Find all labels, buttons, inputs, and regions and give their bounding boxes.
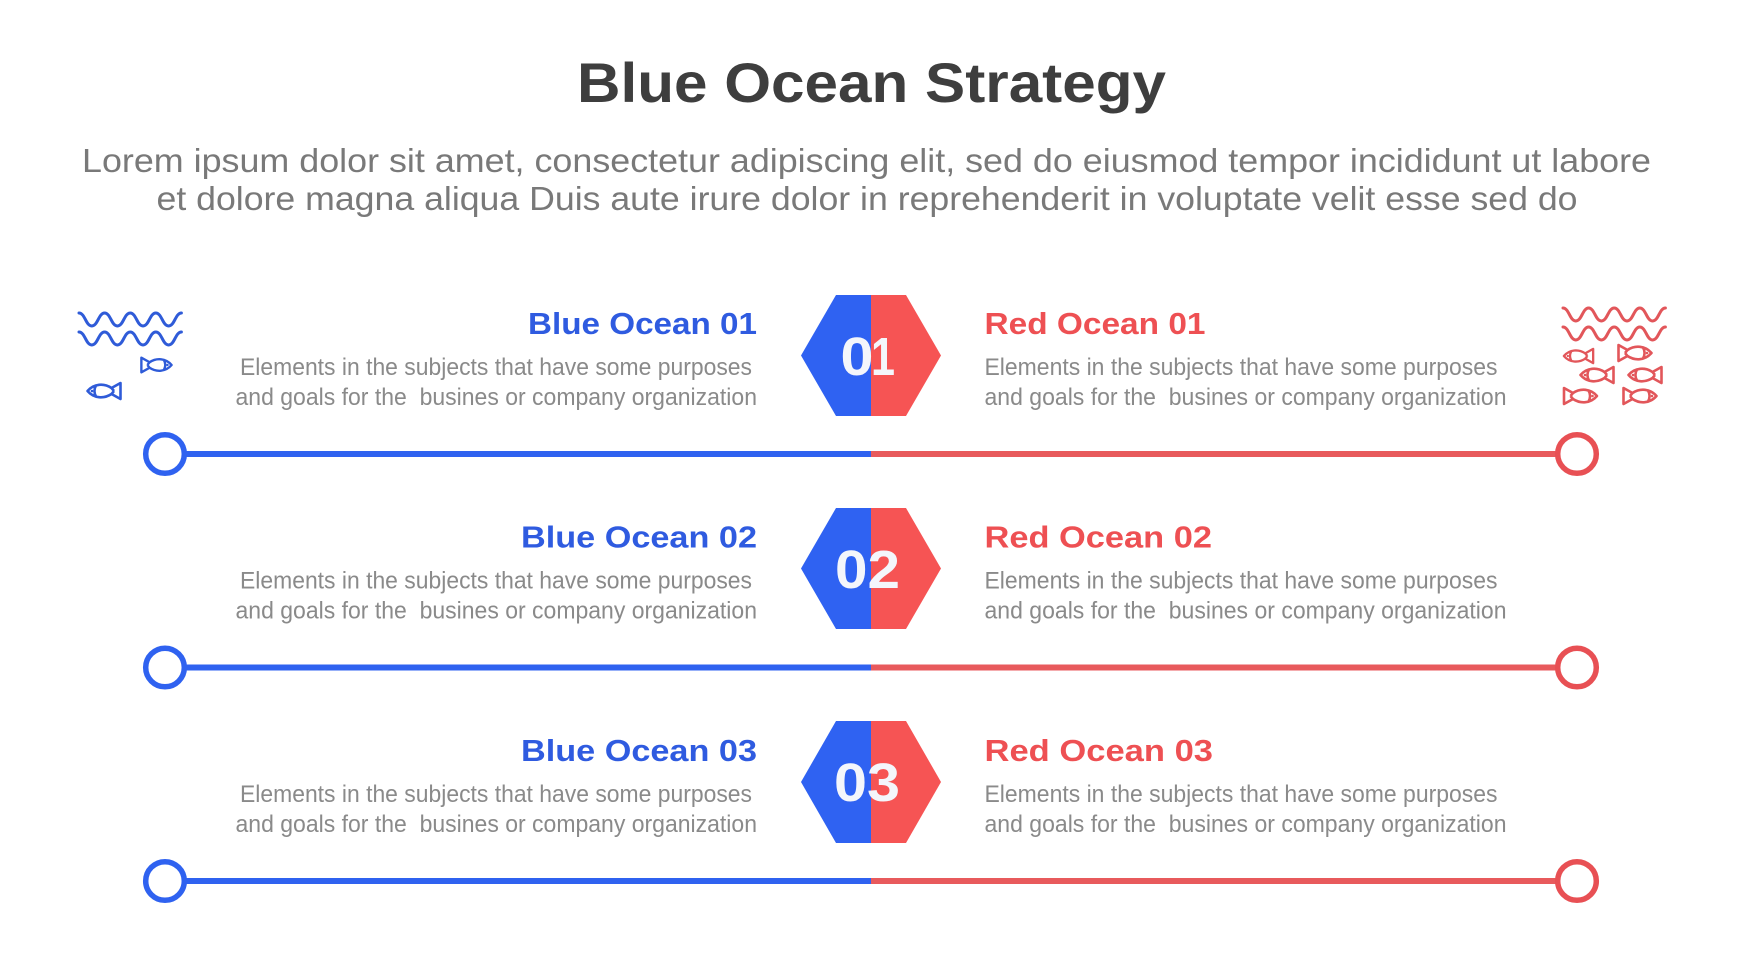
hexagon 02: 02 [835, 540, 900, 600]
hexagon 01 [801, 295, 941, 416]
hexagon 03: 03 [834, 753, 900, 813]
blue text 01 [236, 354, 757, 411]
subtitle text block [82, 142, 1651, 217]
red text 01 [984, 354, 1506, 411]
row 1 [146, 295, 1596, 473]
subtitle text block: et dolore magna aliqua Duis aute irure dolor in reprehenderit in voluptate velit esse sed do [156, 180, 1578, 217]
hexagon 02 [801, 508, 941, 629]
timeline 03 [146, 862, 1596, 900]
red text 03 [984, 781, 1506, 838]
title: Blue Ocean Strategy [577, 51, 1166, 114]
row 3 [146, 721, 1596, 900]
red text 01: and goals for the busines or company organization [984, 384, 1506, 411]
blue text 02: and goals for the busines or company organization [236, 598, 757, 624]
blue text 03: Elements in the subjects that have some purposes [240, 781, 752, 808]
red text 03: and goals for the busines or company organization [984, 811, 1506, 838]
hexagon 01: 0 [840, 327, 874, 387]
red text 02: and goals for the busines or company organization [984, 598, 1506, 624]
blue text 01: Elements in the subjects that have some purposes [240, 354, 752, 381]
red heading 01: Red Ocean 01 [984, 306, 1206, 341]
blue text 02: Elements in the subjects that have some purposes [240, 568, 752, 594]
red text 02: Elements in the subjects that have some purposes [984, 568, 1498, 594]
timeline 01 [146, 435, 1596, 473]
red text 01: Elements in the subjects that have some purposes [984, 354, 1498, 381]
icon: red ocean waves and fish [1563, 308, 1665, 404]
subtitle text block: Lorem ipsum dolor sit amet, consectetur adipiscing elit, sed do eiusmod tempor incididunt ut labore [82, 142, 1651, 179]
red text 03: Elements in the subjects that have some purposes [984, 781, 1498, 808]
blue heading 01: Blue Ocean 01 [528, 306, 757, 341]
red heading 02: Red Ocean 02 [984, 520, 1212, 554]
blue heading 02: Blue Ocean 02 [521, 520, 757, 554]
hexagon 03 [801, 721, 941, 843]
row 2 [146, 508, 1596, 687]
red heading 03: Red Ocean 03 [984, 733, 1213, 768]
blue text 03 [236, 781, 757, 838]
icon: blue ocean waves and fish [79, 313, 181, 399]
blue heading 03: Blue Ocean 03 [521, 733, 757, 768]
red text 02 [984, 568, 1506, 624]
hexagon 01: 1 [871, 327, 895, 387]
blue text 01: and goals for the busines or company organization [236, 384, 757, 411]
timeline 02 [146, 648, 1596, 687]
blue text 03: and goals for the busines or company organization [236, 811, 757, 838]
blue text 02 [236, 568, 757, 624]
